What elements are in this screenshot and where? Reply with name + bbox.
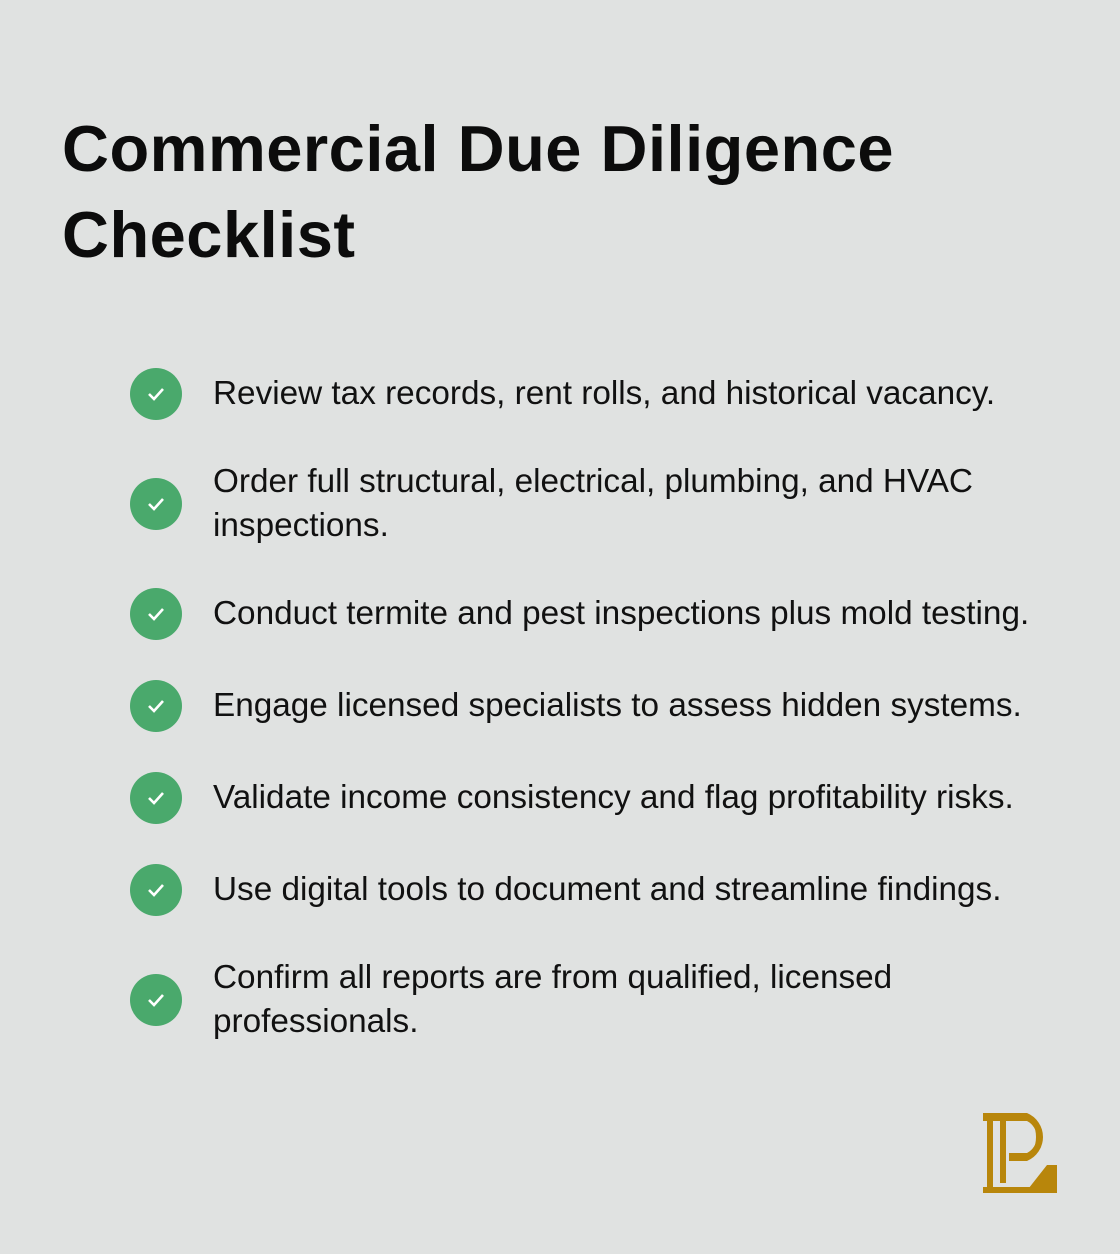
- item 7: [130, 959, 892, 1040]
- item 7: Confirm all reports are from qualified, licensed: [213, 959, 892, 996]
- title: [62, 112, 894, 271]
- item 7: professionals.: [213, 1003, 418, 1040]
- item 2: [130, 463, 973, 544]
- item 2: inspections.: [213, 507, 389, 544]
- item 4: [130, 680, 1022, 732]
- item 5: [130, 772, 1014, 824]
- item 1: Review tax records, rent rolls, and historical vacancy.: [213, 375, 995, 412]
- title: Checklist: [62, 198, 356, 271]
- item 3: Conduct termite and pest inspections plus mold testing.: [213, 595, 1029, 632]
- item 6: [130, 864, 1001, 916]
- item 6: Use digital tools to document and streamline findings.: [213, 871, 1001, 908]
- logo: [983, 1113, 1057, 1193]
- item 2: Order full structural, electrical, plumbing, and HVAC: [213, 463, 973, 500]
- item 3: [130, 588, 1029, 640]
- title: Commercial Due Diligence: [62, 112, 894, 185]
- item 4: Engage licensed specialists to assess hidden systems.: [213, 687, 1022, 724]
- item 5: Validate income consistency and flag profitability risks.: [213, 779, 1014, 816]
- item 1: [130, 368, 995, 420]
